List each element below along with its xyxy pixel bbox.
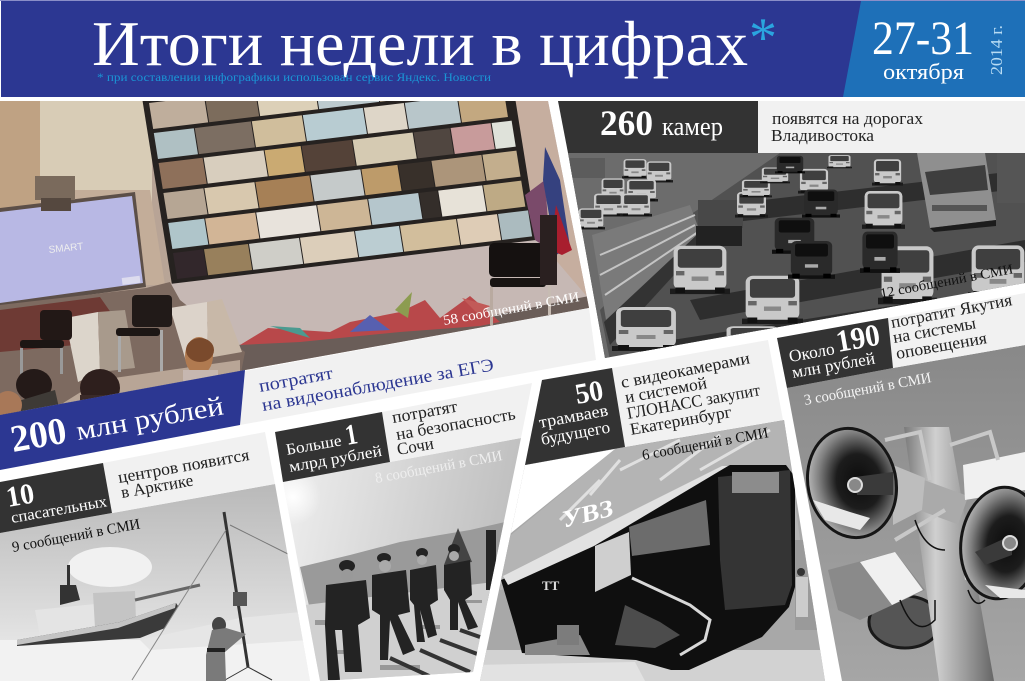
main horn tube [893,465,925,525]
caption strip: потратят [390,397,459,427]
floor and furniture [0,282,245,418]
caption strip: Екатеринбург [628,402,733,439]
caption strip [103,432,275,513]
colourful ribbon decoration [240,292,500,345]
caption strip: появятся на дорогах [772,109,924,128]
officers [325,530,496,680]
caption strip: в Арктике [119,471,195,502]
smoke [68,547,152,587]
panel: 260 cameras in Vladivostok [558,101,1025,365]
exhibition ceiling [500,420,800,590]
logo: УВЗ [562,494,614,534]
source note: * при составлении инфографики использован сервис Яндекс. Новости [97,72,491,84]
bracket [885,432,998,540]
lecture wall below screens [172,240,586,345]
dark number box: 190 [833,317,883,359]
photo: police officers [283,438,521,681]
dark number box: Около [787,339,836,366]
panel: 10 rescue centres in the Arctic [0,432,320,681]
video wall [142,101,536,284]
caption strip [240,308,596,425]
caption strip [758,101,1025,153]
caption strip: потратит Якутия [889,290,1014,332]
photo: loudspeakers [780,340,1025,681]
pole [904,427,994,681]
header banner [0,0,1025,97]
lower cylinder and horn [828,552,941,648]
sun flare [284,482,310,513]
caption strip: Владивостока [771,126,874,145]
blue caption text: на видеонаблюдение за ЕГЭ [260,354,495,415]
truck [696,200,743,246]
photo: monitoring hall [0,101,589,415]
blue caption text: потратят [257,363,335,396]
caption strip: на системы [891,313,978,347]
chairs [20,243,551,374]
date block: 27-31 [872,12,974,65]
dark number box [525,368,625,465]
podiums [65,299,242,382]
caption strip [888,290,1025,368]
date block: октября [883,59,964,84]
caption: 8 messages: 8 сообщений в СМИ [374,448,504,487]
dark number box: 10 [4,478,37,514]
caption strip: с видеокамерами [619,348,751,392]
tram body: ТТ [542,578,560,593]
caption strip [612,340,783,447]
mountains [300,522,505,610]
dark number box [275,412,390,482]
dark number box: 50 [573,375,606,411]
roadside barrier [592,205,700,320]
blue number box [0,370,245,470]
instrument mast [132,512,290,680]
long shadows [390,630,480,681]
caption: 6 messages: 6 сообщений в СМИ [641,425,770,464]
photo: tram [470,415,830,681]
rear horn tube [960,510,990,580]
caption strip: ГЛОНАСС закупит [625,380,762,423]
flag [525,147,572,285]
dark number box: камер [662,112,723,141]
panel: about 190 million rubles in Yakutia [777,290,1025,681]
caption: 12 messages: 12 сообщений в СМИ [879,262,1014,302]
dark number box: трамваев [537,400,610,432]
caption: 9 messages: 9 сообщений в СМИ [11,516,142,556]
caption strip: оповещения [894,328,988,363]
audience heads [0,337,240,420]
cables [900,520,985,627]
left megaphone [798,420,906,546]
projection screen: SMART [48,241,84,256]
panel: 50 trams of the future [470,340,830,681]
caption: 58 messages: 58 сообщений в СМИ [442,290,581,329]
traffic cars [612,155,1025,353]
date block: 2014 г. [987,25,1006,75]
dark number box: 260 [600,103,653,143]
dark number box: спасательных [10,493,108,527]
dark number box: Больше [285,432,343,459]
tram body [501,465,795,670]
dark number box: млн рублей [790,349,876,382]
title asterisk: * [749,7,777,69]
caption strip: центров появится [116,445,251,487]
dark number box [558,101,758,153]
date block [843,1,1025,97]
dark number box [0,463,112,533]
caption strip: Сочи [395,434,435,459]
projector [35,176,75,211]
distant parked cars [570,158,673,229]
caption: 3 messages: 3 сообщений в СМИ [803,370,933,409]
caption strip: на безопасность [394,404,517,444]
road shadows [640,170,1025,358]
trees [444,528,472,565]
dark number box: 1 [343,418,360,452]
left platform [470,662,645,681]
blue number box: млн рублей [74,390,226,446]
hall floor [475,650,830,681]
person at mast [206,617,246,681]
visitor [796,568,808,617]
panel: 200 million rubles, exam video surveillance [0,101,596,470]
bus [917,153,996,232]
panel: over 1 billion rubles for Sochi security [265,383,535,681]
dark floor strip [239,296,589,371]
photo: icebreaker [0,480,320,681]
rear horn cylinder [963,452,1025,500]
caption strip [382,383,532,462]
blue number box: 200 [7,410,70,461]
ship [17,565,200,646]
title: Итоги недели в цифрах [92,8,748,79]
ice ridge [140,612,310,650]
photo: traffic jam [560,150,1025,365]
caption strip: и системой [623,373,708,407]
right megaphone [954,482,1025,604]
dark number box: будущего [539,417,612,449]
dark number box: млрд рублей [288,443,384,476]
snowy ground [306,583,490,681]
dark number box [777,317,893,388]
projection screen [0,192,146,307]
